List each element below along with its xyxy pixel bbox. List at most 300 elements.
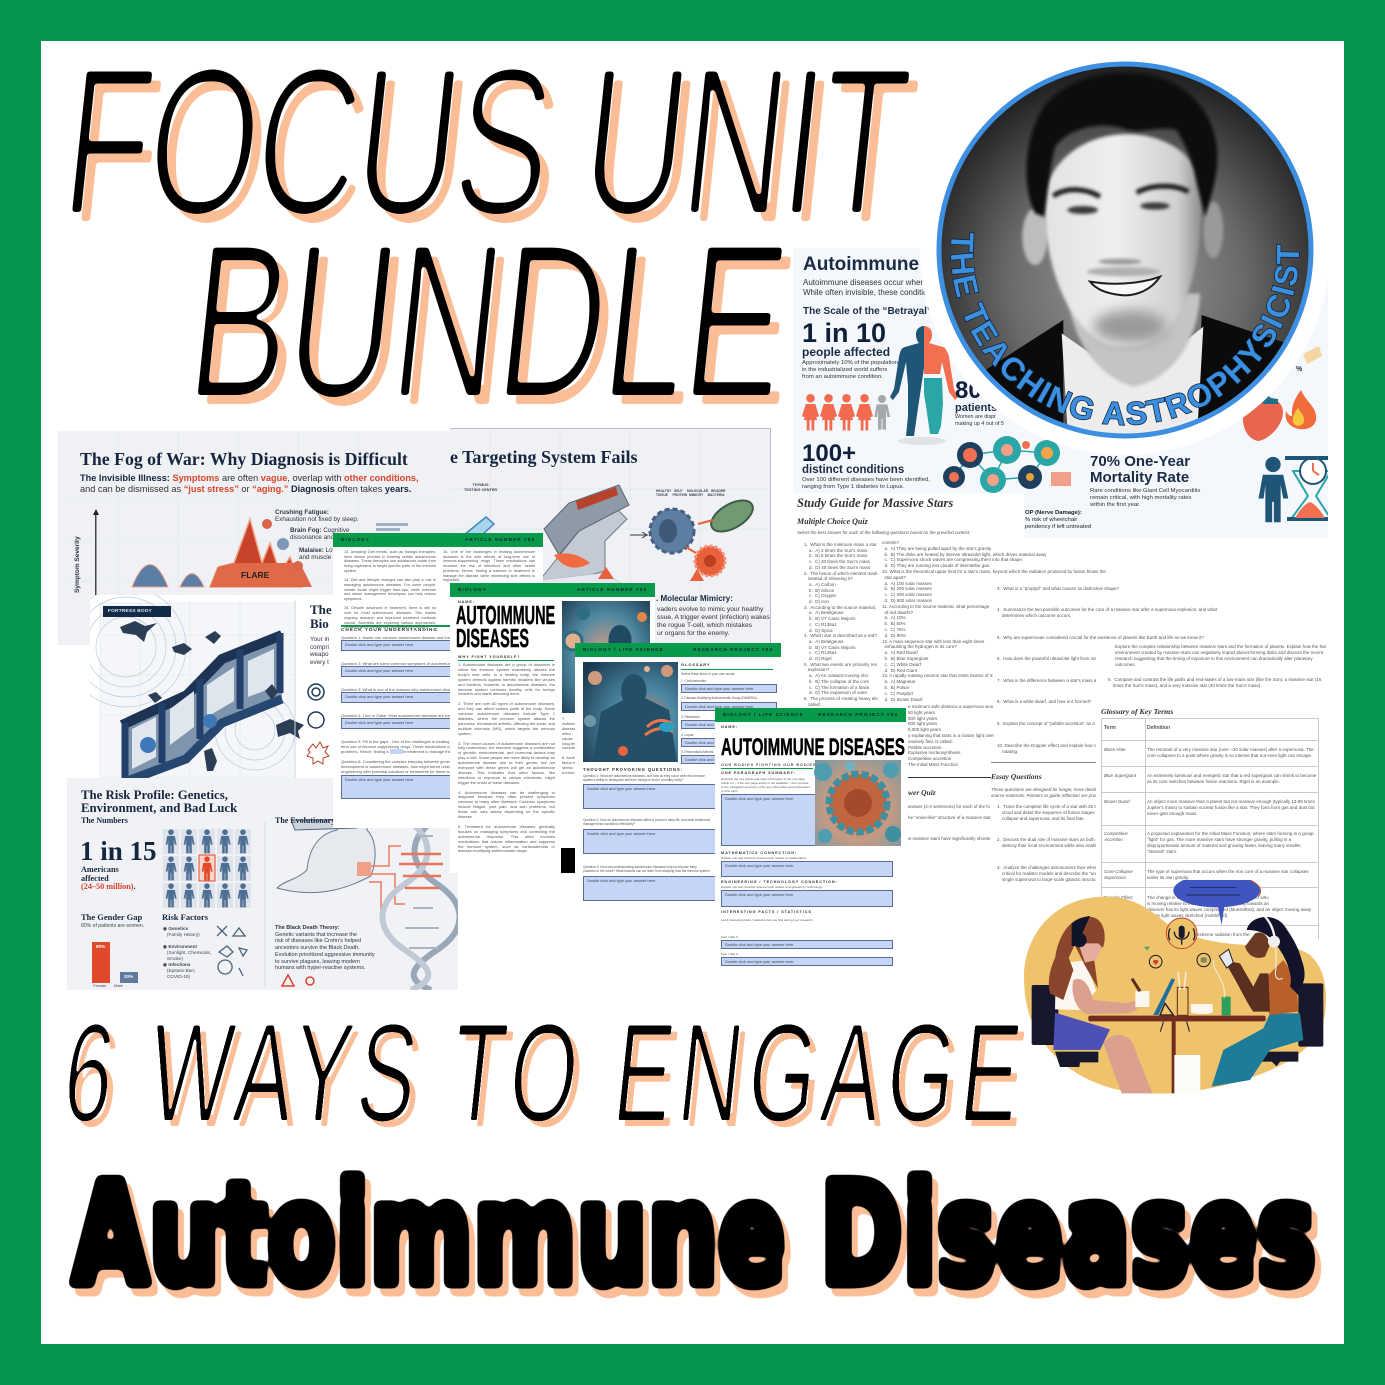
- risk factors list: ◉ Genetics: [163, 926, 188, 931]
- essay questions text: These questions are designed for longer, more detailed: [991, 787, 1101, 792]
- panel: research project worksheet page two: List 2 interesting facts / statistics that you find during your research.: [721, 918, 813, 922]
- thought question three: practices in the future? What lessons can we learn from studying how the immune system: [583, 869, 710, 873]
- risk factors list: [163, 926, 211, 979]
- quiz questions column one: b. B) Silicon: [809, 588, 834, 593]
- quiz questions column two: 13. A rapidly rotating neutron star that emits beams of X: [882, 673, 993, 678]
- panel: glossary of key terms: has its light waves stretched (redshifted).: [1147, 913, 1229, 918]
- quiz questions column two: a. A) They are being pulled apart by the star's gravity.: [884, 546, 992, 551]
- panel: glossary of key terms: Jupiter's mass) to sustain nuclear fusion like a star. They form from gas and dust but: [1147, 805, 1315, 810]
- answer box four: [341, 718, 537, 729]
- targeting machinery and cells artwork: [450, 429, 770, 643]
- autoimmune diseases title: AUTOIMMUNE DISEASES: [721, 734, 905, 761]
- essay prompts: Explore the complex relationship between massive stars and the formation of planets. Explain how the harsh: [1115, 644, 1326, 649]
- quiz questions column one: b. B) The collapse of the core: [809, 679, 869, 684]
- panel: short answer and essay questions: 10. Describe the Doppler effect and explain how col: [997, 743, 1100, 748]
- mortality statistic: [1090, 453, 1190, 486]
- thought question one: system's ability to distinguish self from foreign is lost in a healthy body?: [583, 778, 683, 782]
- answer box four: Double click and type your answer here.: [345, 720, 414, 725]
- quiz questions column two: exhausting the hydrogen in its core?: [884, 644, 957, 649]
- mortality description: Rare conditions like Giant Cell Myocarditis: [1090, 488, 1200, 494]
- glossary term boxes: [681, 679, 777, 764]
- black death theory: The Black Death Theory:: [275, 925, 340, 931]
- quiz questions column two: c. C) 75%: [884, 627, 906, 632]
- subtitle: OUR BODIES FIGHTING OUR BODIES: [721, 763, 816, 767]
- quiz questions column one: a. A) 2 times the Sun's mass: [809, 548, 867, 553]
- research header bar: RESEARCH PROJECT #84: [818, 712, 898, 717]
- portrait ring lettering: THE TEACHING ASTROPHYSICIST: [950, 232, 1300, 426]
- 100+ statistic: 100+: [802, 440, 856, 467]
- essay left rule: [908, 776, 991, 779]
- panel: research project worksheet page two: Explain one way that this science topic relates to engineering / technology.: [721, 885, 823, 889]
- short answer fragment lines: he "onion-like" structure of a massive star: [908, 814, 991, 820]
- immune body image: [583, 662, 773, 762]
- panel: short answer and essay questions: critical for realistic models and describe the "un: [1002, 871, 1096, 876]
- quiz questions column two continued: Pebble accretion: [908, 745, 942, 750]
- interesting facts: INTERESTING FACTS / STATISTICS: [721, 910, 812, 914]
- americans affected: (24–50 million).: [81, 882, 136, 891]
- research header bar: BIOLOGY / LIFE SCIENCE: [583, 647, 664, 652]
- title line two: BUNDLE: [178, 199, 799, 445]
- quiz questions column one: [804, 542, 878, 707]
- americans affected: Americans: [81, 865, 119, 874]
- quiz questions column two: 12. A main-sequence star with less than eight times: [882, 639, 984, 644]
- quiz questions column two: of red dwarfs?: [884, 610, 913, 615]
- quiz questions column one: 5. What two events are primarily res: [804, 662, 877, 667]
- panel: glossary of key terms: never gain enough mass.: [1147, 811, 1198, 816]
- right column text: 7. Autoimmune diseases often cause long-term complications: [562, 716, 586, 750]
- name field: NAME:: [721, 725, 738, 729]
- quiz questions column two: a. A) Magnetar: [884, 679, 916, 684]
- quiz questions column two: b. B) 200 solar masses: [884, 586, 932, 591]
- glossary term boxes: 4. Lupus:: [681, 733, 694, 737]
- subtitle divider: [721, 768, 813, 769]
- patients label: patients: [955, 402, 997, 414]
- question four: Question 4: True or False: Most autoimmune diseases are easy to cure.: [341, 713, 468, 718]
- thought question two: Question 2: How do autoimmune diseases affect a person's daily life, and what treatments: [583, 818, 710, 822]
- article text: 3. The exact causes of autoimmune diseases are not fully understood, but research suggests a combination of genetic, environmental, and hormonal factors may play a role. Some people are more likely to develop an autoimmune disease due to their genes, but not everyone with these genes will get an autoimmune disease. This indicates that other factors, like infections or exposure to certain chemicals, might trigger the onset of these diseases.: [458, 740, 555, 785]
- panel: glossary of key terms: Definition: [1147, 725, 1170, 731]
- quiz questions column two: star apart?: [884, 575, 906, 580]
- glossary table: [1101, 718, 1319, 939]
- summary instructions: on this topic.: [721, 789, 738, 793]
- quiz questions column two: d. D) 500 solar masses: [884, 598, 932, 603]
- question five: problems. Hence, finding a in treatment to manage the disease.: [341, 749, 467, 754]
- quiz questions column two: 10. What is the theoretical upper limit for a star's mass, beyond which the radiation produced by fusion blows the: [882, 569, 1106, 574]
- quiz questions column two continued: e minimum safe distance a supernova wou: [908, 704, 993, 709]
- panel: short answer and essay questions: determines which outcome occurs.: [1002, 613, 1071, 618]
- quiz questions column two continued: Explosive nucleosynthesis: [908, 750, 961, 755]
- thought answer two: [583, 829, 723, 854]
- quiz questions column one: b. B) 8 times the Sun's mass: [809, 553, 867, 558]
- answer box one: [341, 640, 537, 651]
- nerve damage note: pendency if left untreated: [1025, 524, 1091, 530]
- risk factors list: (Family History): [167, 932, 200, 937]
- panel: targeting system fails slide: vaders evolve to mimic your healthy: [657, 606, 763, 613]
- glossary instructions: Define these terms in your own words:: [681, 672, 735, 676]
- quiz questions column one: 3. According to the source material,: [804, 605, 876, 610]
- panel: targeting system fails slide: ssue. A trigger event (infection) wakes: [657, 614, 770, 621]
- quiz questions column one: c. C) Oxygen: [809, 593, 837, 598]
- question five: term use of immune-suppressing drugs. These medications can increase the risk of health: [341, 744, 500, 749]
- distinct conditions description: Over 100 different diseases have been identified,: [802, 477, 930, 483]
- glossary term boxes: Double click and type your answer here.: [685, 686, 754, 691]
- article text: 1. Autoimmune diseases are a group of disorders in which the immune system mistakenly attacks the body's own cells. In a healthy body, the immune system defends against harmful invaders like viruses and bacteria. However, in autoimmune diseases, the immune system confuses healthy cells for foreign invaders and starts attacking them.: [458, 662, 555, 696]
- distinct conditions label: distinct conditions: [802, 464, 904, 476]
- panel: targeting system fails slide: ur organs for the enemy.: [657, 630, 729, 637]
- fortress description: Your in: [310, 636, 329, 643]
- quiz questions column one: a. A) Carbon: [809, 582, 836, 587]
- symptom callouts: [275, 509, 359, 523]
- black death theory: humans with hyper-reactive systems.: [275, 965, 365, 971]
- quiz questions column one: c. C) 20 times the Sun's mass: [809, 559, 870, 564]
- panel: research project worksheet page two: Double click and type your answer here.: [725, 959, 794, 964]
- panel: short answer and essay questions: cloud and detail the sequence of fusion stages t: [1002, 810, 1097, 815]
- panel: glossary of key terms: Black Hole: [1104, 747, 1126, 752]
- panel: glossary of key terms: Core-Collapse: [1104, 869, 1133, 874]
- glossary term boxes: 5. Rheumatoid Arthritis:: [681, 750, 714, 754]
- risk profile artwork: [92, 820, 458, 990]
- glossary term boxes: 1. Corticosteroids:: [681, 679, 707, 683]
- quiz questions column two: c. C) Supernova shock waves are compressing them into that shape.: [884, 557, 1023, 562]
- infection cell image: [715, 708, 906, 975]
- thymus label: [464, 483, 497, 492]
- mathematics connection: MATHEMATICS CONNECTION:: [721, 851, 797, 855]
- panel: presenter portrait badge: [920, 62, 1328, 455]
- people affected description: in the industrialized world suffers: [802, 367, 887, 373]
- quiz questions column one: d. D) 40 times the Sun's mass: [809, 565, 870, 570]
- panel: risk profile slide: [67, 778, 458, 990]
- article paragraphs: 14. Diet and lifestyle changes can also play a role in managing autoimmune diseases. For some people, certain foods might trigger flare-ups, while exercise and stress management techniques can help reduce symptoms.: [344, 578, 436, 601]
- panel: fortress body slide: [90, 595, 335, 778]
- quiz questions column one: instead of releasing it?: [808, 576, 853, 581]
- biological heading: [310, 602, 332, 631]
- quiz questions column two: d. D) 90%: [884, 633, 906, 638]
- fortress description: compri: [310, 644, 329, 651]
- essay divider: [991, 761, 1099, 764]
- panel: glossary of key terms: disproportionate amount of material and growing faster, leaving many smaller,: [1147, 843, 1302, 848]
- panel: short answer and essay questions: 4. Summarize the two possible outcomes for the core of a massive star after a supernova explosion, and what: [997, 607, 1217, 612]
- quiz questions column one: d. D) Rigel: [809, 656, 832, 661]
- title line one: FOCUS UNIT: [62, 34, 929, 268]
- thought provoking heading: THOUGHT PROVOKING QUESTIONS:: [583, 767, 683, 772]
- panel: short answer and essay questions: 2. Discuss the dual role of massive stars as both d: [997, 837, 1099, 842]
- panel: glossary of key terms: The remnant of a very massive star (over ~20 solar masses) after a supernova. The: [1147, 747, 1314, 752]
- quiz questions column one: b. B) VY Canis Majoris: [809, 645, 855, 650]
- biological heading: The: [310, 602, 332, 617]
- thought answer one: [583, 784, 723, 809]
- name field: NAME:: [458, 600, 475, 604]
- distinct conditions description: ranging from Type 1 diabetes to Lupus.: [802, 484, 904, 490]
- fog of war title: The Fog of War: Why Diagnosis is Difficult: [80, 449, 408, 469]
- infographic intro: While often invisible, these conditions can be devastating.: [803, 288, 1008, 297]
- scale subheading: The Scale of the “Betrayal”: [803, 306, 932, 317]
- panel: glossary of key terms: The change in wave frequency in relation to an observer who: [1147, 895, 1269, 900]
- panel: research project worksheet page two: Double click and type your answer here.: [725, 942, 794, 947]
- article header bar: BIOLOGY: [341, 537, 370, 542]
- quiz questions column two: c. C) White Dwarf: [884, 662, 921, 667]
- black death theory: [275, 925, 375, 971]
- quiz questions column one: explosion?: [808, 667, 829, 672]
- numbers heading: The Numbers: [81, 816, 128, 825]
- black death theory: Genetic variants that increase the: [275, 932, 357, 938]
- thought question three: Question 3: How can understanding autoimmune diseases help us improve early: [583, 865, 697, 869]
- summary instructions: a one paragraph summary of the key information and information: [721, 785, 810, 789]
- quiz questions column one: c. C) R136a1: [809, 622, 837, 627]
- quiz questions column one: 6. The process of creating heavy ele: [804, 696, 878, 701]
- short answer questions: 3. What is a "proplyd" and what causes its distinctive shape?: [997, 586, 1119, 591]
- mortality description: [1090, 488, 1200, 508]
- quiz questions column two continued: Competitive accretion: [908, 756, 951, 761]
- infographic intro: [803, 278, 1077, 297]
- thought question three: [583, 865, 710, 873]
- essay questions heading: Essay Questions: [991, 772, 1042, 781]
- thymus label: TESTING CENTER: [464, 488, 497, 492]
- subtitle: 6 ways to engage: 6 WAYS TO ENGAGE: [63, 1000, 1034, 1157]
- answer box three: [341, 692, 537, 703]
- engineering connection: ENGINEERING / TECHNOLOGY CONNECTION:: [721, 880, 838, 884]
- panel: autoimmune statistics infographic: [793, 248, 1328, 538]
- panel: fog of war diagnosis slide: dissonance and memory: [290, 534, 359, 541]
- summary answer box: Double click and type your answer here.: [725, 796, 794, 801]
- thought question two: manage these conditions effectively?: [583, 822, 635, 826]
- panel: targeting system fails slide: [450, 428, 771, 649]
- quiz questions column two: 11. According to the source material, what percentage: [882, 604, 989, 609]
- gender gap heading: The Gender Gap: [81, 912, 142, 922]
- quiz questions column two continued: 50 light years: [908, 710, 935, 715]
- quiz questions column two: [881, 540, 1106, 702]
- panel: research project worksheet page two: Fact / Stat 2:: [721, 952, 739, 956]
- quiz questions column one: a. A) Betelgeuse: [809, 610, 844, 615]
- panel: glossary of key terms: A phenomena where the extreme radiation from the: [1147, 932, 1250, 937]
- panel: glossary of key terms: Blue Supergiant: [1104, 773, 1136, 778]
- question six: [341, 759, 490, 774]
- cell image: [561, 601, 650, 873]
- panel: risk profile slide: 20%: [124, 974, 133, 979]
- question one: Question 1: Name one common autoimmune disease and the part of the body it targets.: [341, 635, 496, 640]
- panel: glossary of key terms: An extremely luminous and energetic star that a red supergiant can shrink to become: [1147, 773, 1316, 778]
- autoimmune diseases stacked title: DISEASES: [456, 623, 529, 653]
- panel: glossary of key terms: Competitive: [1104, 831, 1128, 836]
- panel: glossary of key terms: core collapses to a point where gravity is so intense that not even light can escape.: [1147, 753, 1312, 758]
- quiz instructions: Select the best answer for each of the following questions based on the provided context:: [797, 530, 970, 535]
- panel: research project worksheet page two: Fact / Stat 1:: [721, 935, 739, 939]
- panel: short answer and essay questions: 6. How does the powerful ultraviolet light from mas: [997, 656, 1099, 661]
- answer box one: Double click and type your answer here.: [345, 642, 414, 647]
- panel: short answer and essay questions: collapse and supernova, and its final fate.: [1002, 816, 1085, 821]
- risk factors heading: Risk Factors: [162, 912, 208, 922]
- summary answer box: [721, 794, 817, 846]
- quiz questions column one: 4. Which star is described as a red?: [804, 633, 877, 638]
- panel: short answer and essay questions: 3. Analyze the challenges astronomers face when: [997, 865, 1098, 870]
- short answer fragment lines: w massive stars have significantly shorter: [908, 836, 991, 840]
- cell labels: TISSUE PROTEIN MIMICRY BACTERIA: [656, 493, 725, 497]
- panel: short answer and essay questions: 8. What is a white dwarf, and how is it formed?: [997, 699, 1091, 704]
- panel: glossary of key terms: observer has its light waves compressed (blueshifted), and an object moving away: [1147, 907, 1311, 912]
- essay questions text: source materials. Pointers to guide reflection are provid: [991, 793, 1101, 798]
- essay questions text: [991, 787, 1101, 798]
- percent fragment beside flag: %: [1296, 366, 1302, 373]
- people affected description: [802, 360, 898, 380]
- quiz questions column two: a. A) 10%: [884, 615, 906, 620]
- quiz questions column one: a. A) Betelgeuse: [809, 639, 844, 644]
- nerve damage note: [1025, 510, 1091, 530]
- quiz questions column two continued: [908, 704, 994, 767]
- thought answer three: [583, 876, 723, 901]
- evolutionary heading: The Evolutionary: [275, 816, 335, 825]
- biological heading: Bio: [310, 616, 329, 631]
- mortality statistic: 70% One-Year: [1090, 453, 1190, 470]
- quiz questions column two continued: onsisely fast, is called:: [908, 739, 953, 744]
- panel: short answer and essay questions: 5. Why are supernovae considered crucial for the existence of planets like Earth and life as we know it?: [997, 635, 1204, 640]
- cell labels: [656, 489, 726, 497]
- essay prompts: research suggesting that the timing of exposure to this environment can dramatically alter planetary: [1115, 656, 1313, 661]
- panel: short answer and essay questions: [908, 586, 1217, 882]
- patients description: making up 4 out of 5: [955, 421, 1004, 427]
- fortress description: every t: [310, 659, 329, 666]
- answer box six: [341, 775, 537, 799]
- 1 in 10 statistic: 1 in 10: [802, 318, 886, 348]
- quiz questions column one: called:: [808, 702, 821, 707]
- quiz questions column two continued: 500 light years: [908, 716, 937, 721]
- article paragraphs: 13. Amazing! Diet trends, such as biologic therapies, have shown promise in treating certain autoimmune diseases. These therapies use substances made from living organisms to target specific parts of the immune system.: [344, 550, 436, 573]
- article text: 2. There are over 80 types of autoimmune diseases, and they can affect various parts of the body. Some common autoimmune diseases include Type 1 diabetes, where the immune system attacks the pancreas; rheumatoid arthritis, affecting the joints; and multiple sclerosis (MS), which targets the nervous system.: [458, 701, 555, 736]
- fortress description: [310, 636, 329, 666]
- symptom callouts: Exhaustion not fixed by sleep.: [275, 516, 359, 523]
- glossary rows: Term: [1104, 725, 1116, 731]
- panel: glossary of key terms: times the Sun's mass), and a very massive star (40 times the Sun's mass).: [1113, 683, 1262, 688]
- panel: glossary of key terms: "fight" for gas. The more massive stars have stronger gravity, pulling in a: [1147, 837, 1291, 842]
- gender gap note: 80% of patients are women.: [81, 923, 144, 929]
- short answer fragment lines: [908, 804, 991, 841]
- symptom callouts: Crushing Fatigue:: [275, 509, 329, 516]
- short answer fragment: wer Quiz: [908, 788, 936, 797]
- answer box three: Double click and type your answer here.: [345, 694, 414, 699]
- question two: Question 2: What are some common symptoms of autoimmune diseases?: [341, 661, 472, 666]
- panel: study guide for massive stars: [793, 493, 1106, 841]
- quiz questions column one: 1. What is the minimum mass a star: [804, 542, 877, 547]
- quiz questions column two: b. B) Blue Supergiant: [884, 656, 929, 661]
- multiple choice heading: Multiple Choice Quiz: [797, 517, 868, 526]
- fortress wall blueprint artwork: [90, 595, 330, 778]
- panel: short answer and essay questions: 9. Explain the concept of "pebble accretion" as a n: [997, 721, 1099, 726]
- summary instructions: article for – if the one page article is not available – then provide: [721, 781, 809, 785]
- title line one: FOCUS UNIT: [53, 25, 920, 259]
- quiz questions column one: d. D) The expansion of outer: [809, 690, 867, 695]
- glossary term boxes: 3. Remission:: [681, 715, 700, 719]
- quiz questions column two: d. D) Red Giant: [884, 668, 917, 673]
- quiz questions column one: 2. The fusion of which element mark: [804, 571, 878, 576]
- risk factors list: Smoke): [167, 956, 183, 961]
- people affected label: people affected: [802, 345, 890, 359]
- panel: glossary of key terms: as its core switches between fusion reactions. Rigel is an example.: [1147, 779, 1280, 784]
- understanding divider: [341, 625, 537, 626]
- panel: fog of war diagnosis slide: Brain Fog: Cognitive: [290, 527, 350, 534]
- quiz questions column two: c. C) Peaplyd: [884, 691, 913, 696]
- black death theory: ancestors survive the Black Death.: [275, 945, 360, 951]
- panel: glossary of key terms: Brown Dwarf: [1104, 799, 1130, 804]
- panel: glossary of key terms: "starved" stars.: [1147, 849, 1177, 854]
- glossary term boxes: Double click and type your answer here.: [685, 722, 754, 727]
- study guide white cover: [793, 493, 1024, 543]
- question three: Question 3: What is one of the reasons why autoimmune diseases are hard to diagnose?: [341, 687, 498, 692]
- autoimmune diseases stacked title: AUTOIMMUNE: [456, 600, 555, 630]
- panel: glossary of key terms: An object more massive than a planet but not massive enough (typically 13-80 times: [1147, 799, 1315, 804]
- research header bar: RESEARCH PROJECT #84: [693, 647, 773, 652]
- essay prompts: [1115, 644, 1326, 667]
- panel: glossary of key terms: A proposed explanation for the Initial Mass Function, where stars forming in a group: [1147, 831, 1314, 836]
- panel: research project worksheet page one: [575, 643, 781, 911]
- thought answer three: Double click and type your answer here.: [587, 878, 656, 883]
- panel: fog of war diagnosis slide: and muscle aches: [299, 554, 350, 561]
- glossary term boxes: Double click and type your answer here.: [685, 740, 754, 745]
- panel: glossary of key terms: The type of supernova that occurs when the iron core of a massive star collapses: [1147, 869, 1309, 874]
- quiz questions column two continued: y explaining that stars in a cluster light over: [908, 733, 994, 738]
- invisible illness intro: [80, 473, 419, 494]
- risk factors list: ◉ Environment: [163, 944, 197, 949]
- panel: research project worksheet page two: Double click and type your answer here.: [725, 863, 794, 868]
- quiz questions column one: c. C) The formation of a black: [809, 685, 869, 690]
- study guide title: Study Guide for Massive Stars: [797, 496, 953, 510]
- glossary heading: Glossary of Key Terms: [1101, 707, 1173, 716]
- fortress body badge: FORTRESS BODY: [108, 609, 152, 614]
- risk factors list: ◉ Infections: [163, 962, 191, 967]
- article header bar: [450, 583, 655, 597]
- question six: development of autoimmune diseases, how might future research in genetic: [341, 764, 475, 769]
- thymus label: THYMUS: [473, 483, 489, 487]
- panel: glossary of key terms: under its own gravity.: [1147, 875, 1189, 880]
- molecular mimicry text: . Molecular Mimicry:: [656, 594, 733, 603]
- invisible illness intro: and can be dismissed as “just stress” or “aging.” Diagnosis often takes years.: [80, 484, 411, 494]
- quiz questions column two: a. A) Red Dwarf: [884, 650, 918, 655]
- panel: research project worksheet page two: Double click and type your answer here.: [725, 892, 794, 897]
- quiz questions column two: comets?: [882, 540, 899, 545]
- right column text: 8. Another factor is stress hormones: [562, 755, 580, 775]
- panel: article worksheet page one: 16. One of the challenges in treating autoimmune diseases is the side effects of long-term use of immune-suppressing drugs. These medications can increase the risk of infections and other health problems. Hence, finding a balance in treatment to manage the disease while minimizing side effects is important.: [443, 550, 535, 582]
- mortality description: within the first year.: [1090, 502, 1140, 508]
- panel: glossary of key terms: Accretion: [1104, 837, 1123, 842]
- glossary term boxes: Double click and type your answer here.: [685, 757, 754, 762]
- subtitle divider: [458, 660, 554, 661]
- panel: fog of war diagnosis slide: [58, 431, 450, 645]
- people affected description: Approximately 10% of the population: [802, 360, 898, 366]
- glossary label: GLOSSARY: [681, 662, 710, 667]
- risk factors list: (Epstein-Barr,: [167, 968, 196, 973]
- black death theory: to survive plagues, leaving modern: [275, 959, 360, 965]
- black death theory: Evolution prioritized aggressive immunity: [275, 952, 375, 958]
- distinct conditions description: [802, 477, 930, 490]
- panel: short answer and essay questions: destroy their local environment while also enabli: [1002, 843, 1098, 848]
- panel: glossary of key terms: is moving relative to the source. An object moving towards an: [1147, 901, 1269, 906]
- chart axis label: Symptom Severity: [74, 536, 81, 593]
- risk factors list: (Sunlight, Chemicals,: [167, 950, 211, 955]
- black death theory: risk of diseases like Crohn's helped: [275, 938, 361, 944]
- question six: Question 6: Considering the complex interplay between genes, environment and the: [341, 759, 490, 764]
- research header bar: BIOLOGY / LIFE SCIENCE: [723, 712, 804, 717]
- article header bar: ARTICLE NUMBER #84: [577, 587, 647, 592]
- panel: targeting system fails slide: the rogue T-cell, which mistakes: [657, 622, 752, 629]
- panel: glossary of key terms: Doppler Effect: [1104, 895, 1133, 900]
- 1 in 15 statistic: 1 in 15: [80, 836, 157, 866]
- autoimmune diseases stacked title: [456, 600, 555, 653]
- quiz questions column one: c. C) R136a1: [809, 650, 837, 655]
- research header bar: [575, 643, 781, 657]
- risk factors list: COVID-19): [167, 974, 190, 979]
- answer box six: Double click and type your answer here.: [345, 777, 414, 782]
- quiz questions column two: b. B) The disks are heated by intense ultraviolet light, which drives material away: [884, 552, 1046, 557]
- essay prompts: environment created by massive stars can negatively impact planet-forming disks and discuss the recent: [1115, 650, 1323, 655]
- mortality statistic: Mortality Rate: [1090, 469, 1189, 486]
- nerve damage note: OP (Nerve Damage):: [1025, 510, 1082, 516]
